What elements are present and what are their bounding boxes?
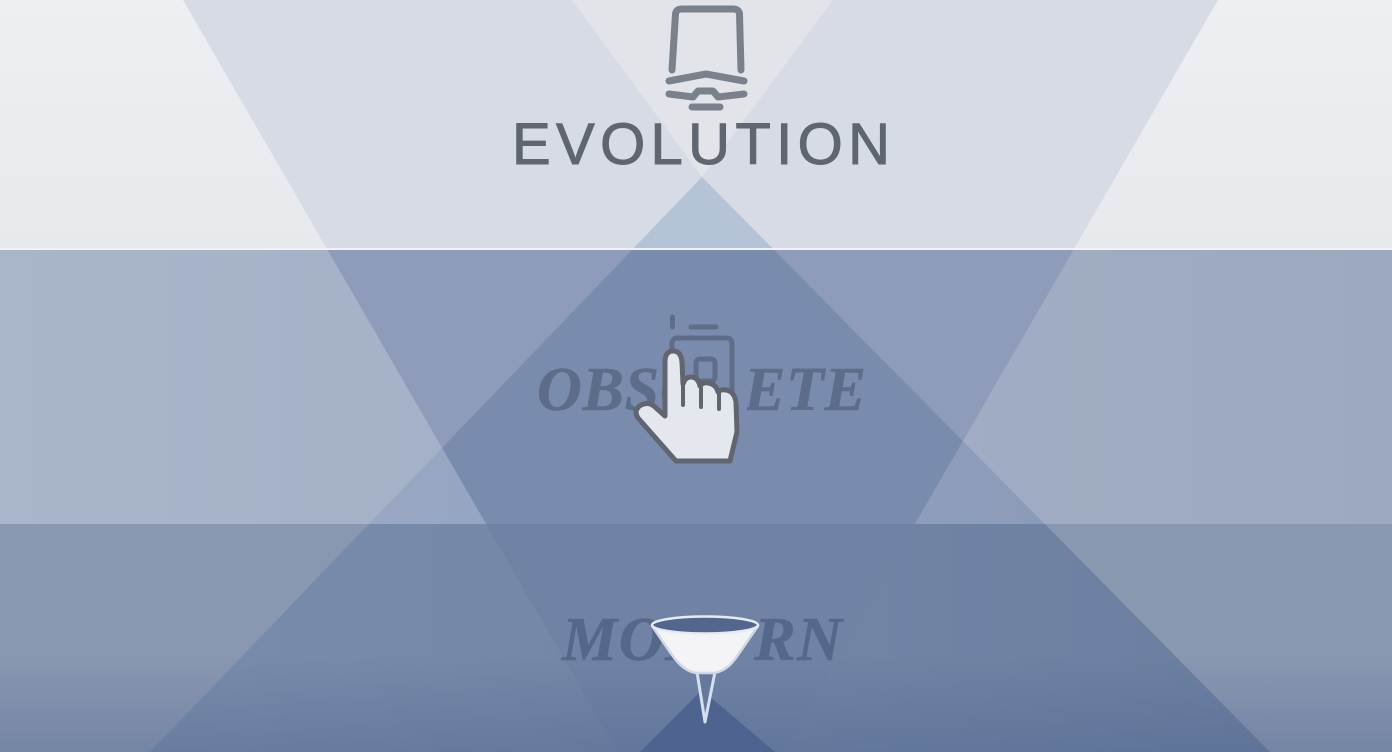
panel: middle band [328,250,1392,524]
panel: bottom band [0,524,1392,752]
heading: Evolution: EVOLUTION [512,112,890,177]
heading: Modern: MODERN [561,606,844,674]
icon: pointing hand [636,351,737,461]
panel: top band [0,0,1392,248]
funnel backdrop covering the hidden letter [700,628,754,664]
funnel spout [697,672,715,722]
divider line between top and middle bands [0,248,1392,250]
phone backdrop covering the hidden letters [668,336,747,420]
funnel bowl [652,626,758,673]
heading: Obsolete: OBSOLETE [537,356,866,424]
icon: phone outline [672,317,732,398]
funnel rim [652,616,758,634]
icon: phone with pointing hand [636,317,747,461]
icon: computer monitor and keyboard [669,9,744,107]
icon: funnel [652,616,758,722]
